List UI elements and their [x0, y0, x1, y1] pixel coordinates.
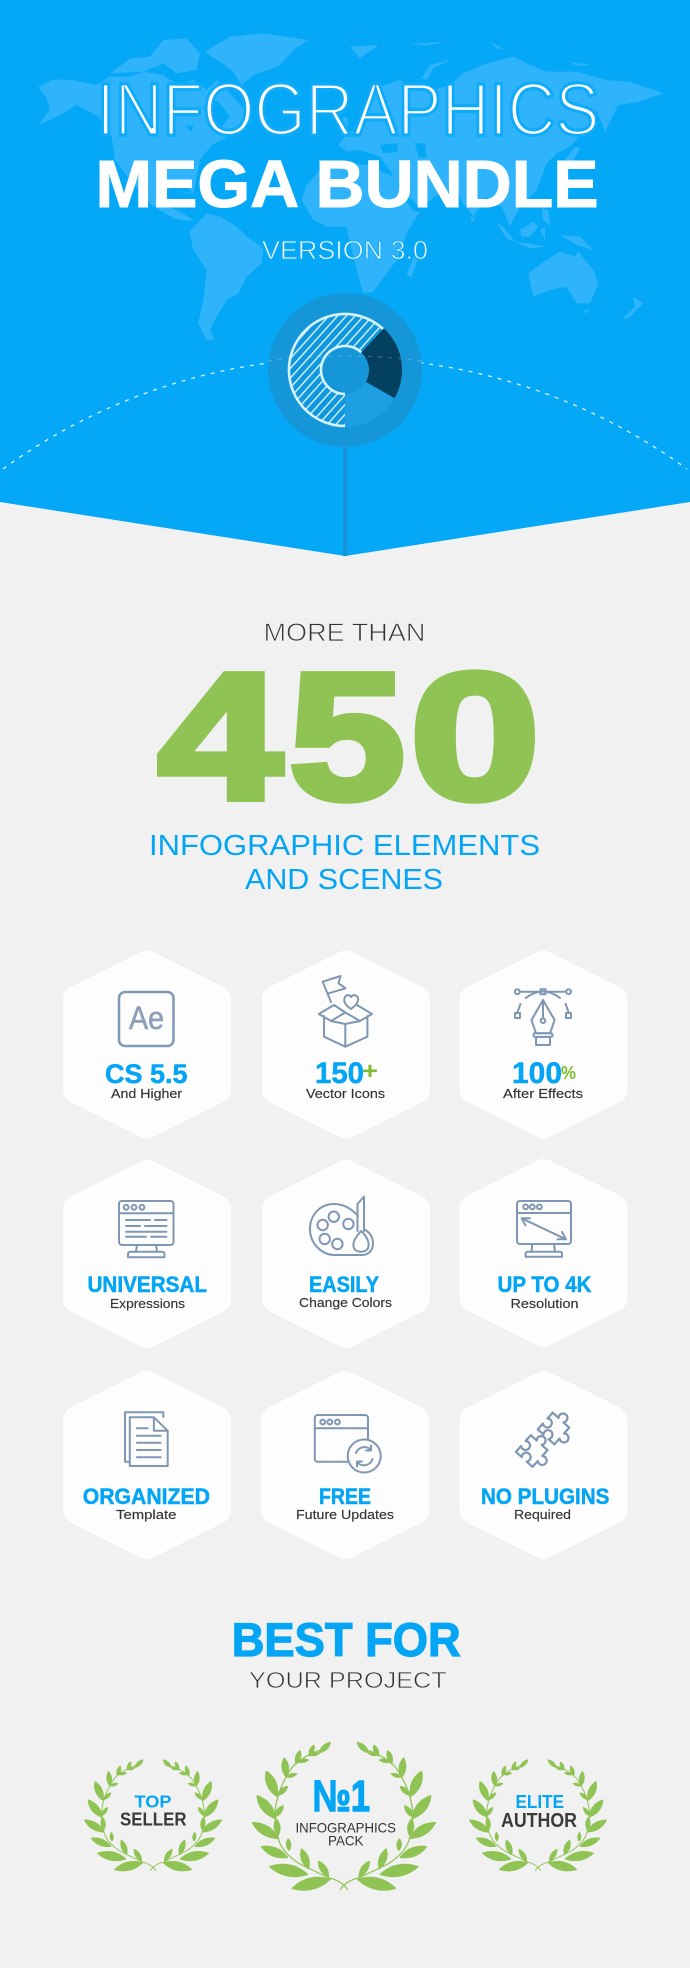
label: FREE [319, 1484, 371, 1509]
sublabel: Expressions [110, 1296, 186, 1311]
label: ORGANIZED [83, 1484, 210, 1509]
heading: more than: MORE THAN [264, 619, 426, 647]
label: UP TO 4K [498, 1272, 592, 1297]
icon: monitor resize [517, 1201, 571, 1257]
panel: cs 5.5 [77, 964, 217, 1124]
label: NO PLUGINS [481, 1484, 609, 1509]
badge text: INFOGRAPHICS [296, 1820, 396, 1836]
badge text: TOP [134, 1792, 172, 1812]
laurel wreath [470, 1760, 606, 1871]
version label: VERSION 3.0 [262, 235, 428, 265]
badge text [120, 1792, 186, 1830]
big number 450: 4 [158, 635, 282, 837]
icon: palette and brush [310, 1197, 373, 1255]
panel: universal expressions [77, 1174, 217, 1334]
label: 100 [512, 1057, 562, 1090]
badge text [501, 1791, 577, 1832]
donut chart icon [268, 293, 422, 447]
badge text: ELITE [516, 1791, 564, 1812]
connector line [343, 440, 348, 556]
subheading: infographic elements: INFOGRAPHIC ELEMENTS [149, 830, 540, 862]
label: 150 [315, 1057, 364, 1090]
sublabel: Required [514, 1507, 571, 1522]
panel: up to 4k resolution [474, 1173, 614, 1333]
icon: documents [125, 1412, 168, 1466]
badge text: PACK [328, 1832, 364, 1848]
dashed arc [3, 358, 687, 469]
label: UNIVERSAL [88, 1272, 207, 1297]
icon: after effects: Ae [129, 1000, 164, 1036]
badge text: AUTHOR [501, 1810, 577, 1832]
title: infographics: INFOGRAPHICS [96, 68, 600, 151]
laurel wreath [253, 1743, 435, 1890]
panel: organized template [77, 1385, 217, 1545]
icon: box with flag and heart [319, 976, 372, 1047]
label: + [362, 1058, 378, 1085]
icon: puzzle pieces [516, 1407, 580, 1472]
badge: no.1 infographics pack [253, 1743, 435, 1890]
laurel wreath [85, 1760, 221, 1871]
sublabel: Template [116, 1507, 176, 1522]
icon: pen tool [515, 989, 571, 1045]
sublabel: Change Colors [299, 1295, 393, 1310]
panel: free future updates [275, 1385, 415, 1545]
big number 450: 5 [289, 637, 405, 837]
heading: best for: BEST FOR [232, 1613, 461, 1666]
badge text: SELLER [120, 1810, 186, 1830]
title: mega bundle: MEGA BUNDLE [96, 147, 598, 222]
sublabel: Resolution [510, 1296, 578, 1311]
subheading: your project: YOUR PROJECT [249, 1667, 447, 1693]
sublabel: Future Updates [296, 1507, 395, 1522]
badge text [296, 1772, 396, 1848]
sublabel: Vector Icons [306, 1086, 386, 1101]
label: CS 5.5 [105, 1059, 188, 1089]
big number 450 [158, 635, 540, 837]
panel: 150+ vector icons [276, 964, 416, 1124]
panel: easily change colors [276, 1174, 416, 1334]
icon: browser refresh [315, 1415, 381, 1472]
icon: monitor code [119, 1201, 174, 1257]
label: EASILY [309, 1272, 379, 1297]
big number 450: 0 [410, 636, 540, 837]
sublabel: And Higher [111, 1086, 183, 1101]
badge text: №1 [313, 1772, 370, 1821]
badge: top seller [85, 1760, 221, 1871]
panel: 100% after effects [474, 964, 614, 1124]
label: % [561, 1063, 576, 1083]
panel: blue header [0, 0, 690, 556]
world map [38, 33, 663, 340]
badge: elite author [470, 1760, 606, 1871]
panel: no plugins required [474, 1385, 614, 1545]
subheading: and scenes: AND SCENES [245, 864, 443, 896]
icon: after effects [119, 992, 174, 1046]
sublabel: After Effects [503, 1086, 584, 1101]
